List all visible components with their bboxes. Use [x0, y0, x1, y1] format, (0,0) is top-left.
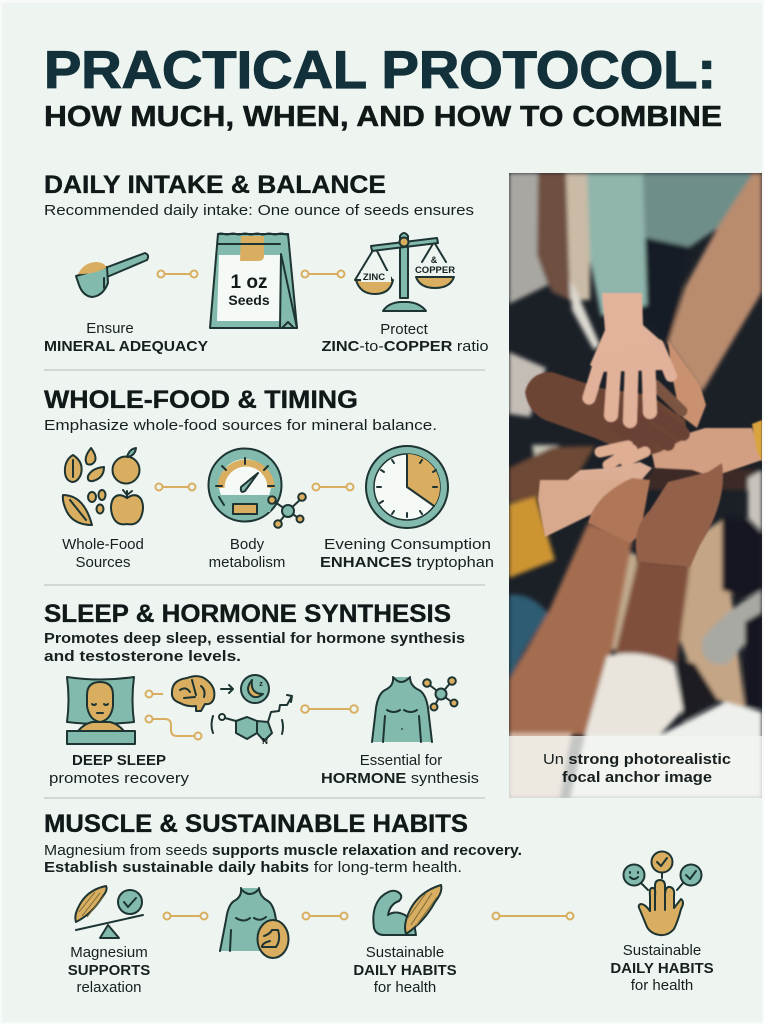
- icon: hand with smiley and checks: [624, 852, 702, 935]
- label: essential for hormone synthesis: HORMONE synthesis: [321, 770, 479, 787]
- panel: whole-food and timing: [44, 386, 494, 571]
- label: whole-food sources: Sources: [75, 554, 131, 571]
- label: sustainable daily habits center: for health: [374, 979, 436, 996]
- label: ensure mineral adequacy: MINERAL ADEQUACY: [44, 338, 208, 355]
- label: whole-food sources: Whole-Food: [62, 536, 144, 553]
- text: muscle intro: Magnesium from seeds supports muscle relaxation and recovery.: [44, 842, 522, 859]
- label: body metabolism: metabolism: [209, 554, 285, 571]
- arrow: connector molecule to torso: [301, 705, 358, 713]
- icon: scoop: [76, 253, 148, 297]
- icon: balance scale: COPPER: [415, 265, 455, 276]
- label: ensure mineral adequacy: [44, 320, 208, 355]
- icon: seed bag: Seeds: [228, 292, 270, 308]
- label: protect zinc to copper ratio: [322, 321, 488, 355]
- icon: brain to moon: z: [259, 681, 263, 688]
- icon: torso with molecule: [372, 677, 458, 742]
- photo: stacked hands: [509, 173, 762, 798]
- arrow: connector bag to scale: [302, 270, 344, 278]
- icon: evening clock: [366, 446, 448, 528]
- label: sustainable daily habits right: Sustainable: [623, 942, 701, 959]
- text: muscle intro: [44, 842, 522, 876]
- icon: brain to moon: [172, 675, 269, 711]
- arrow: connector foods to metabolism: [156, 484, 196, 490]
- arrow: connector metabolism to clock: [312, 484, 354, 490]
- label: evening consumption: [320, 536, 494, 571]
- icon: balance scale: &: [431, 255, 438, 265]
- icon: serotonin molecule: N: [262, 737, 268, 746]
- text: sleep intro: Promotes deep sleep, essential for hormone synthesis: [44, 630, 465, 647]
- icon: seed bag: 1 oz: [231, 272, 267, 293]
- icon: torso with flexed arm badge: [220, 888, 288, 958]
- label: sustainable daily habits right: [610, 942, 714, 994]
- label: sustainable daily habits center: DAILY HABITS: [353, 962, 457, 979]
- text: sleep intro: [44, 630, 465, 665]
- caption band: Un strong photorealistic: [543, 751, 731, 768]
- title: PRACTICAL PROTOCOL:: [44, 41, 716, 100]
- label: deep sleep: [49, 752, 190, 787]
- icon: flexed bicep with muscle: [373, 885, 441, 935]
- label: magnesium supports relaxation: SUPPORTS: [68, 962, 150, 979]
- icon: nuts and apples: [63, 448, 143, 525]
- label: body metabolism: [209, 536, 285, 571]
- label: whole-food sources: [62, 536, 144, 571]
- text: muscle intro: Establish sustainable daily habits for long-term health.: [44, 859, 462, 876]
- label: body metabolism: Body: [230, 536, 265, 553]
- label: sustainable daily habits center: [353, 944, 457, 996]
- label: evening consumption: ENHANCES tryptophan: [320, 554, 494, 571]
- panel: muscle and sustainable habits: [44, 810, 714, 996]
- icon: balance scale: [355, 233, 455, 311]
- panel: sleep and hormone synthesis: [44, 600, 479, 787]
- heading: sleep: SLEEP & HORMONE SYNTHESIS: [44, 600, 451, 628]
- icon: serotonin molecule: [212, 695, 292, 746]
- arrow: connector scoop to bag: [158, 270, 198, 278]
- label: ensure mineral adequacy: Ensure: [86, 320, 134, 337]
- label: sustainable daily habits center: Sustainable: [366, 944, 444, 961]
- label: evening consumption: Evening Consumption: [324, 536, 491, 553]
- label: essential for hormone synthesis: [321, 752, 479, 787]
- label: sustainable daily habits right: for health: [631, 977, 693, 994]
- icon: muscle on seesaw with check: [75, 886, 143, 938]
- label: magnesium supports relaxation: [68, 944, 150, 996]
- text: sleep intro: and testosterone levels.: [44, 648, 241, 665]
- heading: muscle: MUSCLE & SUSTAINABLE HABITS: [44, 810, 468, 838]
- icon: sleeping person: [67, 677, 135, 744]
- label: sustainable daily habits right: DAILY HABITS: [610, 960, 714, 977]
- label: deep sleep: promotes recovery: [49, 770, 190, 787]
- label: essential for hormone synthesis: Essential for: [360, 752, 442, 769]
- arrow: connector sleep to brain: [146, 690, 163, 698]
- icon: balance scale: ZINC: [363, 272, 385, 283]
- arrow: connector torso to bicep: [302, 912, 348, 920]
- caption band: focal anchor image: [562, 769, 712, 786]
- label: protect zinc to copper ratio: Protect: [380, 321, 429, 338]
- heading: whole-food: WHOLE-FOOD & TIMING: [44, 386, 358, 414]
- label: protect zinc to copper ratio: ZINC-to-COPPER ratio: [322, 338, 488, 355]
- arrow: connector bicep to hand: [492, 912, 574, 920]
- title: [44, 41, 722, 133]
- label: magnesium supports relaxation: Magnesium: [70, 944, 148, 961]
- icon: seed bag: [210, 234, 297, 328]
- title: HOW MUCH, WHEN, AND HOW TO COMBINE: [44, 101, 722, 133]
- label: magnesium supports relaxation: relaxation: [76, 979, 142, 996]
- arrow: connector sleep to molecule: [146, 716, 202, 740]
- caption band: [509, 736, 762, 798]
- text: daily intake intro: Recommended daily intake: One ounce of seeds ensures: [44, 202, 474, 219]
- label: deep sleep: DEEP SLEEP: [72, 752, 166, 769]
- arrow: connector seesaw to torso: [164, 912, 208, 920]
- text: whole-food intro: Emphasize whole-food sources for mineral balance.: [44, 417, 437, 434]
- icon: metabolism gauge: [208, 448, 306, 528]
- panel: daily intake and balance: [44, 171, 488, 355]
- heading: daily intake: DAILY INTAKE & BALANCE: [44, 171, 386, 199]
